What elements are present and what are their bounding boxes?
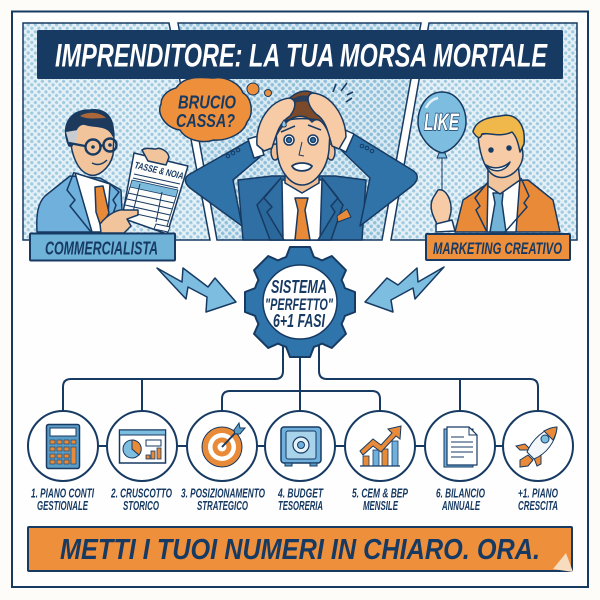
- thought bubble: brucio cassa: [160, 77, 272, 142]
- lapels: [67, 172, 119, 232]
- face: [70, 118, 114, 175]
- label: commercialista: COMMERCIALISTA: [45, 238, 158, 258]
- hair: [276, 91, 329, 136]
- eyebrows: [281, 119, 321, 132]
- lapels: [257, 178, 343, 240]
- right hand: [308, 93, 346, 149]
- torso: [238, 176, 366, 240]
- step 6: bilancio annuale: [425, 411, 495, 513]
- neck: [285, 170, 319, 193]
- grey temple: [66, 130, 78, 143]
- panel: centre comic panel: [178, 23, 421, 240]
- glasses: [69, 138, 116, 154]
- gear: sistema perfetto: "PERFETTO": [265, 295, 334, 314]
- eyes and mouth: [91, 145, 95, 149]
- arrow: right lightning bolt: [365, 267, 444, 312]
- sweat drop: [282, 120, 286, 127]
- shirt: [75, 173, 110, 232]
- arrow: left lightning bolt: [157, 268, 236, 312]
- step 3: posizionamento strategico: [181, 411, 265, 513]
- panel: left comic panel: [23, 23, 210, 240]
- pointing hand: [100, 210, 138, 233]
- balloon: [418, 92, 466, 153]
- icon: calculator: [46, 424, 80, 468]
- jacket: [455, 180, 560, 232]
- call to action: [28, 527, 573, 572]
- step 3: posizionamento strategico: 3. POSIZIONAMENTO: [181, 486, 265, 500]
- step 2: cruscotto storico: STORICO: [123, 499, 159, 513]
- call to action: METTI I TUOI NUMERI IN CHIARO. ORA.: [60, 534, 540, 566]
- gear: sistema perfetto: 6+1 FASI: [273, 311, 326, 331]
- title: [37, 30, 563, 79]
- gear: sistema perfetto: SISTEMA: [271, 277, 327, 297]
- jacket: [37, 176, 123, 232]
- balloon highlight: [426, 98, 438, 108]
- stress marks: [333, 83, 353, 102]
- table rows: [122, 174, 180, 226]
- step 2: cruscotto storico: [107, 411, 177, 513]
- right arm: [341, 133, 417, 226]
- step 4: budget tesoreria: TESORERIA: [278, 499, 323, 513]
- connectors: gear to steps: [63, 345, 538, 446]
- shirt: [487, 178, 520, 232]
- thought bubble: brucio cassa: BRUCIO: [178, 92, 236, 112]
- label: marketing creativo: [426, 234, 570, 260]
- step 3: posizionamento strategico: STRATEGICO: [197, 499, 248, 513]
- left arm: [186, 140, 260, 226]
- smile: [486, 162, 510, 171]
- eyes: [284, 135, 294, 145]
- neck: [488, 165, 520, 194]
- icon: target: [202, 423, 245, 467]
- document: [122, 153, 188, 234]
- thought bubble: brucio cassa: CASSA?: [176, 110, 235, 131]
- tie: [95, 186, 109, 227]
- step 6: bilancio annuale: 6. BILANCIO: [436, 486, 485, 500]
- lapels: [475, 178, 529, 232]
- mouth: [292, 163, 312, 171]
- step 4: budget tesoreria: [265, 411, 335, 513]
- document heading: TASSE & NOIA: [133, 160, 185, 182]
- sleeve buttons: [226, 144, 374, 158]
- step 7: piano crescita: CRESCITA: [518, 499, 558, 513]
- step 7: piano crescita: +1. PIANO: [518, 486, 558, 500]
- step 4: budget tesoreria: 4. BUDGET: [277, 486, 324, 500]
- step 5: cem e bep mensile: [345, 411, 415, 513]
- icon: document: [444, 427, 477, 467]
- face: [276, 112, 330, 185]
- hair: [473, 115, 524, 152]
- panel: right comic panel: [391, 23, 577, 240]
- step 6: bilancio annuale: ANNUALE: [441, 499, 480, 513]
- string: [441, 157, 443, 196]
- pocket square: [337, 209, 351, 222]
- step 1: piano conti gestionale: [28, 411, 98, 513]
- left hand: [257, 98, 295, 151]
- gear: sistema perfetto: [245, 247, 355, 357]
- icon: growth chart: [360, 426, 401, 466]
- label: commercialista: [30, 234, 175, 260]
- eyes: [489, 148, 493, 152]
- step 2: cruscotto storico: 2. CRUSCOTTO: [110, 486, 172, 500]
- top hand: [142, 148, 169, 165]
- tie: [295, 198, 310, 240]
- step 1: piano conti gestionale: 1. PIANO CONTI: [31, 486, 94, 500]
- step 7: piano crescita: [503, 411, 573, 513]
- table header: [130, 180, 178, 197]
- step 5: cem e bep mensile: 5. CEM & BEP: [352, 486, 408, 500]
- step 1: piano conti gestionale: GESTIONALE: [37, 499, 88, 513]
- icon: dashboard: [120, 430, 166, 463]
- illustration: stressed entrepreneur: [186, 83, 417, 240]
- cuff: [436, 220, 455, 232]
- ears: [271, 144, 279, 160]
- hand: [431, 190, 451, 226]
- balloon word: LIKE: [424, 109, 460, 136]
- icon: rocket: [516, 427, 557, 467]
- shirt: [282, 180, 322, 240]
- illustration: commercialista: [37, 110, 188, 234]
- nose: [299, 142, 304, 156]
- cuffs: [248, 130, 354, 158]
- icon: safe: [281, 427, 321, 466]
- hair: [66, 110, 113, 146]
- tie: [490, 193, 506, 232]
- illustration: marketing creativo: [418, 92, 560, 232]
- step 5: cem e bep mensile: MENSILE: [363, 499, 398, 513]
- footer box: [154, 224, 170, 232]
- face: [478, 128, 523, 178]
- balloon knot: [437, 153, 447, 158]
